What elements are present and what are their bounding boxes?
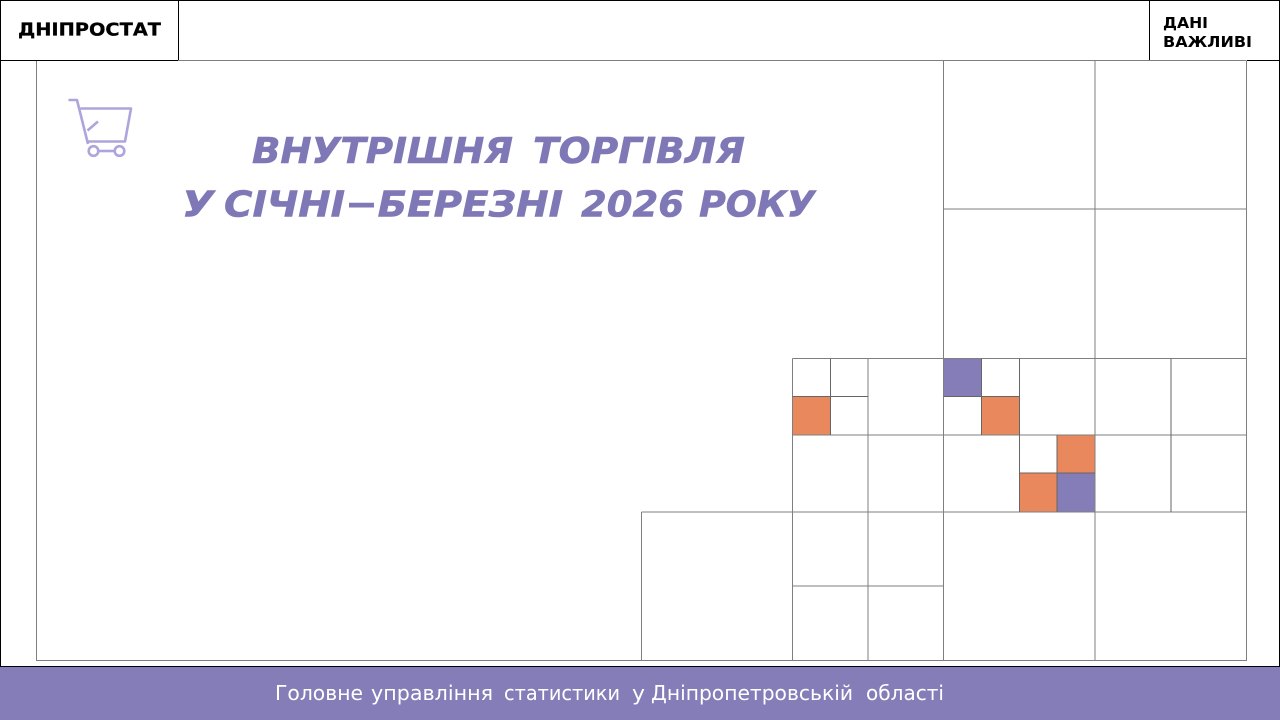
mosaic grid: [36, 60, 1246, 660]
footer text: області: [866, 681, 944, 705]
icon: shopping cart: [68, 100, 131, 156]
title: СІЧНІ−БЕРЕЗНІ: [224, 184, 563, 226]
footer text: управління: [371, 681, 493, 705]
header label: Dniprostat: ДНІПРОСТАТ: [18, 20, 162, 40]
title: У: [182, 184, 217, 226]
title: [182, 131, 817, 226]
title: 2026: [581, 184, 684, 226]
title: РОКУ: [699, 184, 817, 226]
header label: data matters: ВАЖЛИВІ: [1163, 33, 1252, 51]
title: ВНУТРІШНЯ: [252, 131, 513, 172]
footer bar: [0, 666, 1280, 720]
footer text: Дніпропетровській: [651, 681, 853, 705]
title: ТОРГІВЛЯ: [533, 131, 745, 172]
footer text: статистики: [504, 681, 620, 705]
footer text: Головне: [275, 681, 363, 705]
footer text: [275, 681, 944, 705]
header label: data matters: ДАНІ: [1163, 14, 1208, 32]
footer text: у: [632, 681, 645, 705]
orange and purple squares: [792, 358, 1095, 512]
header label: data matters: [1163, 14, 1252, 51]
